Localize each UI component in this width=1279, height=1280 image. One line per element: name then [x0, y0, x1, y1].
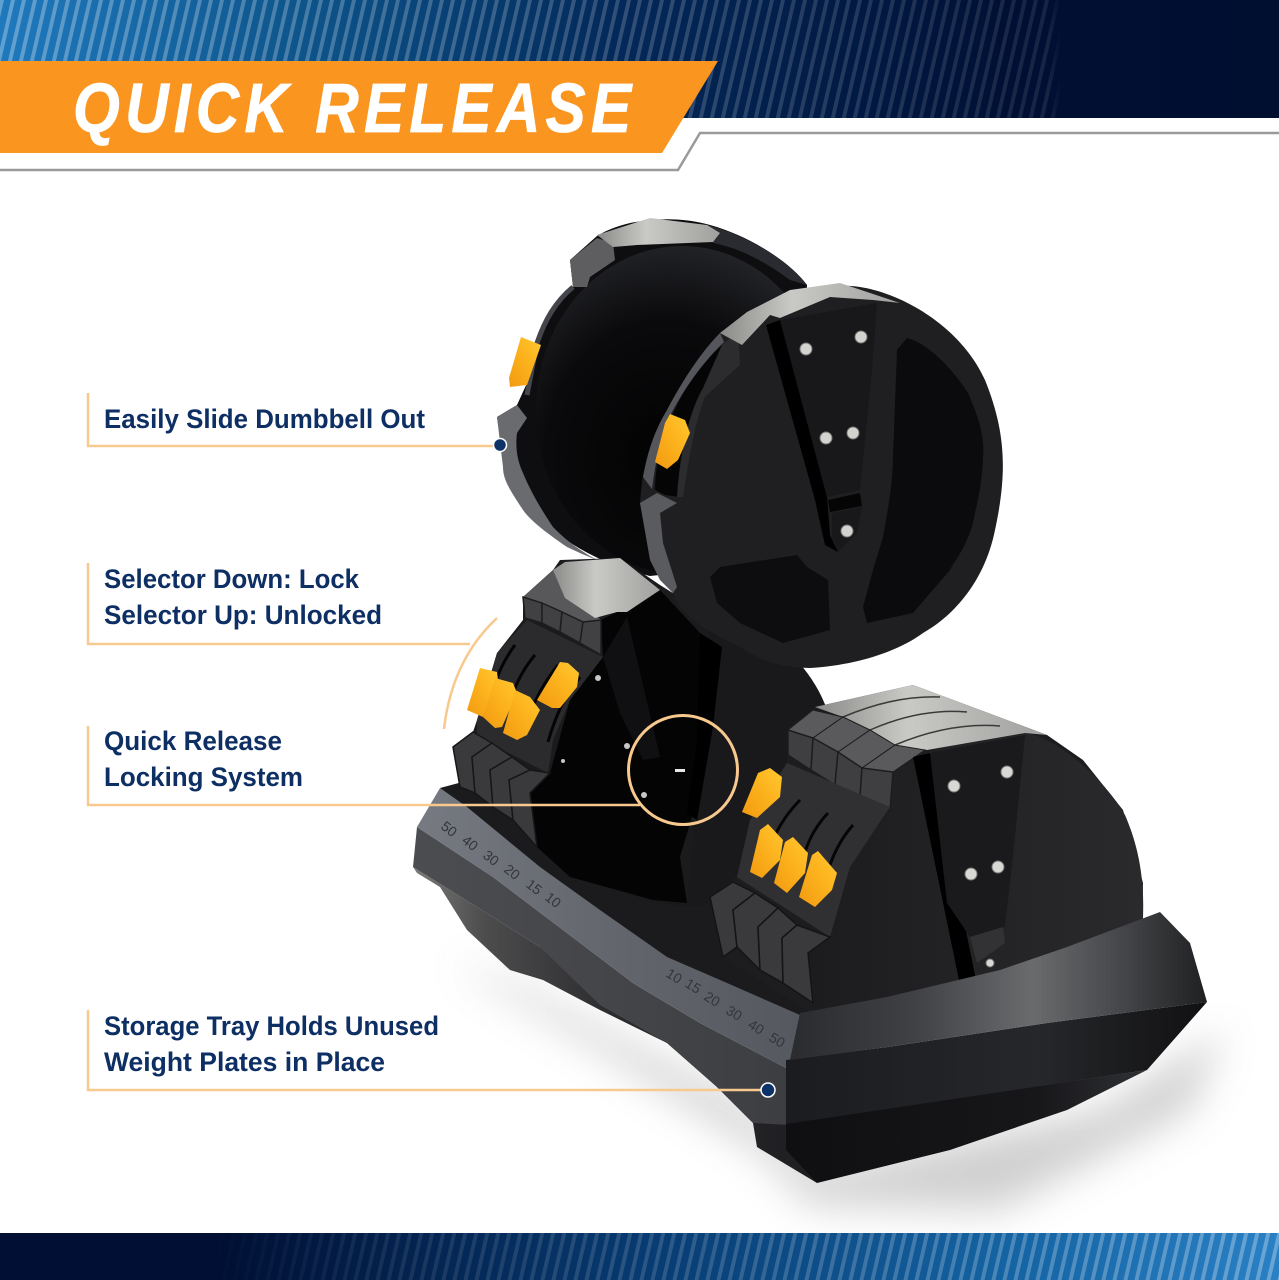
centre plate — [930, 735, 1025, 937]
header band — [0, 0, 1279, 118]
cap tops — [788, 710, 925, 772]
tray tick numbers: 50 — [438, 818, 460, 840]
tray tick numbers: 40 — [459, 832, 481, 854]
leader line — [88, 393, 497, 446]
label text line two: Weight Plates in Place — [104, 1047, 385, 1077]
label text: Selector Down: Lock — [104, 564, 360, 594]
tray tick numbers: 30 — [480, 847, 502, 869]
upper face plate — [603, 617, 660, 760]
label text: Quick Release — [104, 726, 282, 756]
tray left wing — [413, 788, 817, 1183]
marker dot — [761, 1083, 775, 1097]
tray tick numbers: 10 — [663, 965, 685, 987]
selector ribs — [477, 620, 603, 773]
plate groove — [766, 320, 838, 552]
label text: Easily Slide Dumbbell Out — [104, 404, 425, 434]
rear plate lower lip — [497, 405, 650, 576]
top silver — [553, 558, 660, 618]
leader line — [88, 563, 470, 644]
lower blocks — [453, 732, 550, 847]
title: QUICK RELEASE — [73, 69, 633, 147]
selector ribs — [737, 763, 890, 937]
callout: quick release locking system — [88, 716, 738, 824]
rear plate silhouette — [497, 219, 807, 576]
tray tick numbers: 20 — [701, 988, 723, 1010]
silver separators — [843, 697, 1000, 745]
right pocket — [863, 338, 983, 623]
tray tick numbers: 15 — [523, 876, 545, 898]
tray tick numbers: 40 — [745, 1016, 767, 1038]
base silhouette — [453, 558, 713, 903]
lower left dumbbell — [453, 558, 836, 906]
tray tick numbers — [438, 818, 788, 1051]
body — [808, 732, 1143, 1030]
selector guide — [677, 332, 740, 497]
label text line two: Selector Up: Unlocked — [104, 600, 382, 630]
screws — [800, 331, 867, 537]
black face — [530, 590, 713, 903]
callout: storage tray — [88, 1010, 775, 1097]
label text line two: Locking System — [104, 762, 303, 792]
screws — [948, 766, 1013, 967]
header grey rule — [0, 133, 1279, 170]
leader line — [88, 1010, 763, 1090]
groove — [913, 753, 977, 985]
leader line — [88, 726, 640, 805]
lower plate — [832, 507, 862, 552]
selectors — [742, 768, 837, 907]
rear plate silver top — [597, 218, 720, 247]
base silhouette — [710, 685, 1143, 1025]
upper rear dumbbell plate — [497, 218, 828, 576]
lower lip — [640, 493, 677, 593]
tray front mid — [786, 1002, 1207, 1124]
lock latch highlight — [675, 769, 685, 772]
cap tops — [523, 570, 601, 622]
tray tick numbers: 10 — [542, 889, 564, 911]
tray mid face — [413, 827, 790, 1125]
tray top band — [417, 788, 800, 1070]
tray tick numbers: 15 — [682, 975, 704, 997]
highlight circle — [628, 716, 738, 824]
marker dot — [494, 438, 506, 452]
rear plate dark upper rim — [707, 225, 807, 285]
selectors — [467, 662, 579, 740]
rib slots — [775, 800, 853, 865]
bottom pocket — [710, 555, 830, 643]
silver top — [815, 685, 1047, 750]
centre plate — [780, 303, 877, 497]
tray front block — [786, 912, 1207, 1183]
lower blocks — [710, 882, 830, 1003]
top caps — [788, 730, 893, 810]
callout: easily slide dumbbell out — [88, 393, 506, 452]
right dumbbell — [710, 685, 1143, 1030]
tray front bottom — [786, 1070, 1147, 1183]
floor shadow — [450, 960, 1225, 1210]
tray tick numbers: 50 — [766, 1029, 788, 1051]
latch — [828, 493, 862, 512]
tray tick numbers: 30 — [723, 1002, 745, 1024]
tray tick numbers: 20 — [501, 861, 523, 883]
title banner — [0, 61, 718, 153]
plate outer — [640, 286, 1003, 668]
top caps — [523, 597, 601, 655]
left opening — [655, 345, 740, 497]
selector arc — [444, 618, 497, 729]
tray front top band — [790, 912, 1207, 1060]
left rim — [643, 333, 724, 489]
tray underside — [413, 867, 817, 1183]
rear plate gray block — [570, 238, 615, 287]
selector — [509, 337, 541, 387]
rib slots — [493, 645, 580, 742]
silver rim — [720, 283, 900, 345]
selector — [655, 414, 690, 469]
rear plate rim stroke — [527, 287, 573, 395]
latch — [970, 927, 1005, 963]
front plate of upper dumbbell — [640, 283, 1003, 668]
rear plate face — [536, 246, 828, 574]
screws — [561, 675, 647, 798]
footer band — [0, 1233, 1279, 1280]
tray floor — [440, 780, 1000, 1030]
rear disc — [544, 614, 836, 906]
callout: selector lock — [88, 563, 497, 729]
centre groove — [687, 633, 722, 820]
label text: Storage Tray Holds Unused — [104, 1011, 439, 1041]
